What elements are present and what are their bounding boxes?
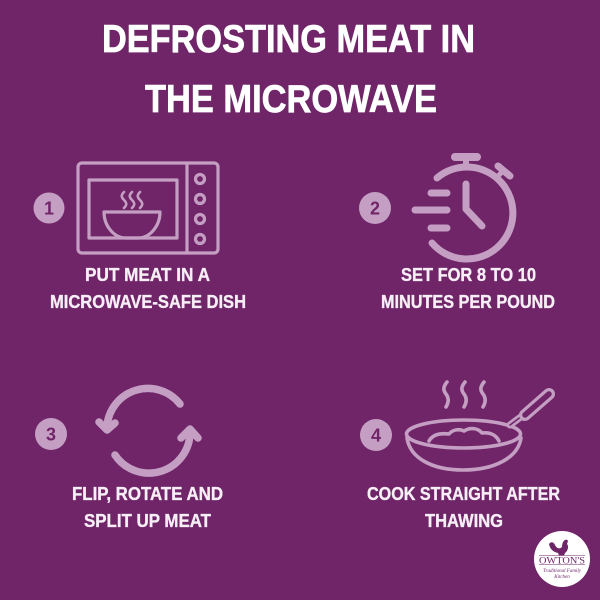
logo divider lines	[539, 556, 585, 564]
icon: rotate arrows	[99, 388, 198, 473]
step 3 label: FLIP, ROTATE AND	[72, 484, 223, 504]
step 2 number badge: 2	[370, 198, 380, 218]
title: THE MICROWAVE	[145, 78, 437, 121]
logo wordmark: OWTON'S	[539, 556, 585, 566]
step 4 label: THAWING	[425, 511, 503, 531]
step 4 label	[367, 484, 560, 531]
step 1 number badge: 1	[44, 198, 54, 218]
step 2 number badge	[359, 192, 391, 224]
step 1 label: PUT MEAT IN A	[85, 265, 210, 285]
step 3 label	[72, 484, 223, 531]
step 4 number badge	[360, 419, 392, 451]
step 1 number badge	[34, 192, 64, 224]
title: DEFROSTING MEAT IN	[102, 18, 475, 61]
step 2 label	[381, 265, 555, 312]
logo tagline second line: Kitchen	[553, 575, 570, 580]
step 4 label: COOK STRAIGHT AFTER	[367, 484, 560, 504]
icon: stopwatch	[415, 157, 513, 259]
step 2 label: MINUTES PER POUND	[381, 292, 555, 312]
step 3 number badge	[35, 418, 67, 450]
step 4 number badge: 4	[371, 426, 381, 446]
title	[102, 18, 475, 121]
icon: rooster	[549, 540, 568, 556]
icon: microwave with bowl	[78, 163, 218, 253]
step 3 number badge: 3	[46, 424, 56, 444]
logo tagline: Traditional Family	[543, 569, 582, 574]
logo: Owton's badge	[534, 531, 590, 587]
step 1 label	[50, 265, 246, 312]
step 3 label: SPLIT UP MEAT	[84, 511, 211, 531]
step 2 label: SET FOR 8 TO 10	[401, 265, 536, 285]
icon: frying pan	[406, 382, 549, 470]
step 1 label: MICROWAVE-SAFE DISH	[50, 292, 246, 312]
